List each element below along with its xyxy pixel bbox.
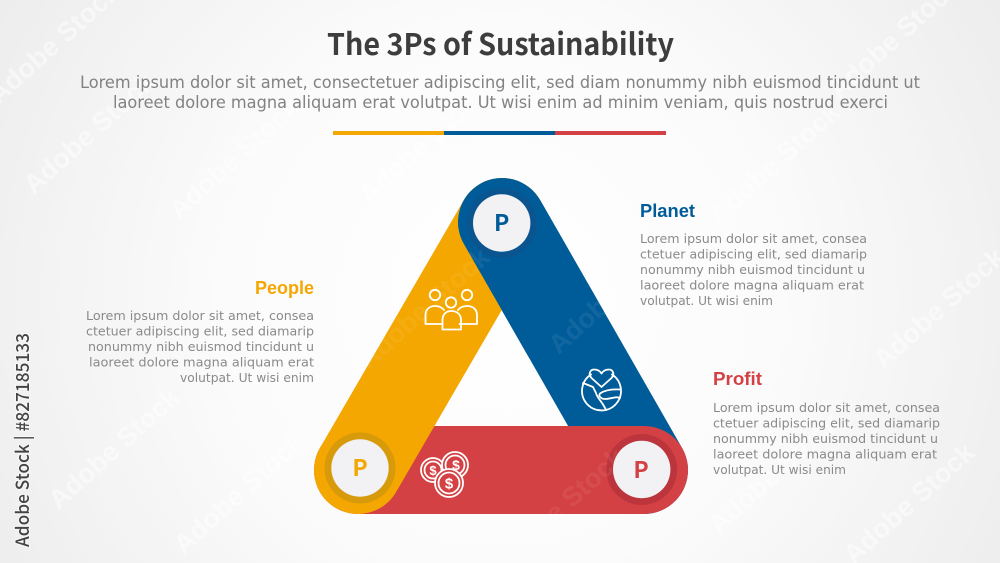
band: people xyxy=(358,222,502,470)
text block: planet xyxy=(640,200,867,308)
band: profit xyxy=(358,426,644,514)
body: people: Lorem ipsum dolor sit amet, consea xyxy=(86,309,314,323)
body: people: laoreet dolore magna aliquam erat xyxy=(89,356,314,370)
body: people: ctetuer adipiscing elit, sed diamarip xyxy=(86,324,314,338)
stock watermarks: Adobe Stock xyxy=(163,91,306,225)
badge: people: P xyxy=(352,449,368,483)
body: planet: laoreet dolore magna aliquam erat xyxy=(640,278,864,292)
stock watermarks: Adobe Stock xyxy=(168,426,311,560)
body: planet: volutpat. Ut wisi enim xyxy=(640,294,773,308)
stock watermarks: Adobe Stock xyxy=(353,76,496,210)
stock watermarks: Adobe Stock xyxy=(703,406,846,540)
body: people xyxy=(86,309,314,385)
text block: profit xyxy=(713,368,940,477)
badge: profit: P xyxy=(633,451,649,485)
subtitle text: Lorem ipsum dolor sit amet, consectetuer adipiscing elit, sed diam nonummy nibh euismod tincidunt ut xyxy=(80,73,921,92)
title: The 3Ps of Sustainability xyxy=(327,20,674,64)
band: planet upper xyxy=(502,222,565,332)
body: planet: nonummy nibh euismod tincidunt u xyxy=(640,263,865,277)
heading: profit: Profit xyxy=(713,368,762,389)
side credit: Adobe Stock | #827185133 xyxy=(9,333,35,547)
text block: people xyxy=(86,277,314,385)
badge: profit xyxy=(606,434,677,505)
body: people: volutpat. Ut wisi enim xyxy=(180,371,314,385)
body: profit: ctetuer adipiscing elit, sed diamarip xyxy=(713,416,940,430)
triangle diagram xyxy=(324,188,677,505)
body: profit: Lorem ipsum dolor sit amet, consea xyxy=(713,401,940,415)
stock watermarks: Adobe Stock xyxy=(43,381,186,515)
icon: globe with heart xyxy=(582,370,621,410)
body: profit: nonummy nibh euismod tincidunt u xyxy=(713,432,938,446)
icon: coins: $ xyxy=(452,457,460,473)
body: planet xyxy=(640,232,867,308)
icon: coins: $ xyxy=(445,476,454,492)
badge: people xyxy=(324,432,396,504)
stock watermarks: Adobe Stock xyxy=(703,96,846,230)
body: planet: Lorem ipsum dolor sit amet, consea xyxy=(640,232,867,246)
body: planet: ctetuer adipiscing elit, sed diamarip xyxy=(640,248,867,262)
tricolor divider bar xyxy=(333,131,666,135)
icon: people xyxy=(426,290,477,330)
faint watermarks over diagram: Adobe Stock xyxy=(353,241,496,375)
band: planet lower xyxy=(502,222,644,470)
badge: planet: P xyxy=(494,204,509,238)
subtitle text xyxy=(80,73,921,112)
faint watermarks over diagram xyxy=(353,226,686,563)
body: people: nonummy nibh euismod tincidunt u xyxy=(88,340,314,354)
icon: coins xyxy=(421,452,468,497)
heading: planet: Planet xyxy=(640,200,695,221)
heading: people: People xyxy=(255,277,314,298)
body: profit: laoreet dolore magna aliquam erat xyxy=(713,448,937,462)
badge: planet xyxy=(467,188,537,258)
icon: coins: $ xyxy=(429,463,437,478)
subtitle text: laoreet dolore magna aliquam erat volutpat. Ut wisi enim ad minim veniam, quis nostrud exerci xyxy=(113,93,888,112)
body: profit: volutpat. Ut wisi enim xyxy=(713,463,846,477)
body: profit xyxy=(713,401,940,477)
faint watermarks over diagram: Adobe Stock xyxy=(543,226,686,360)
stock watermarks: Adobe Stock xyxy=(18,66,161,200)
